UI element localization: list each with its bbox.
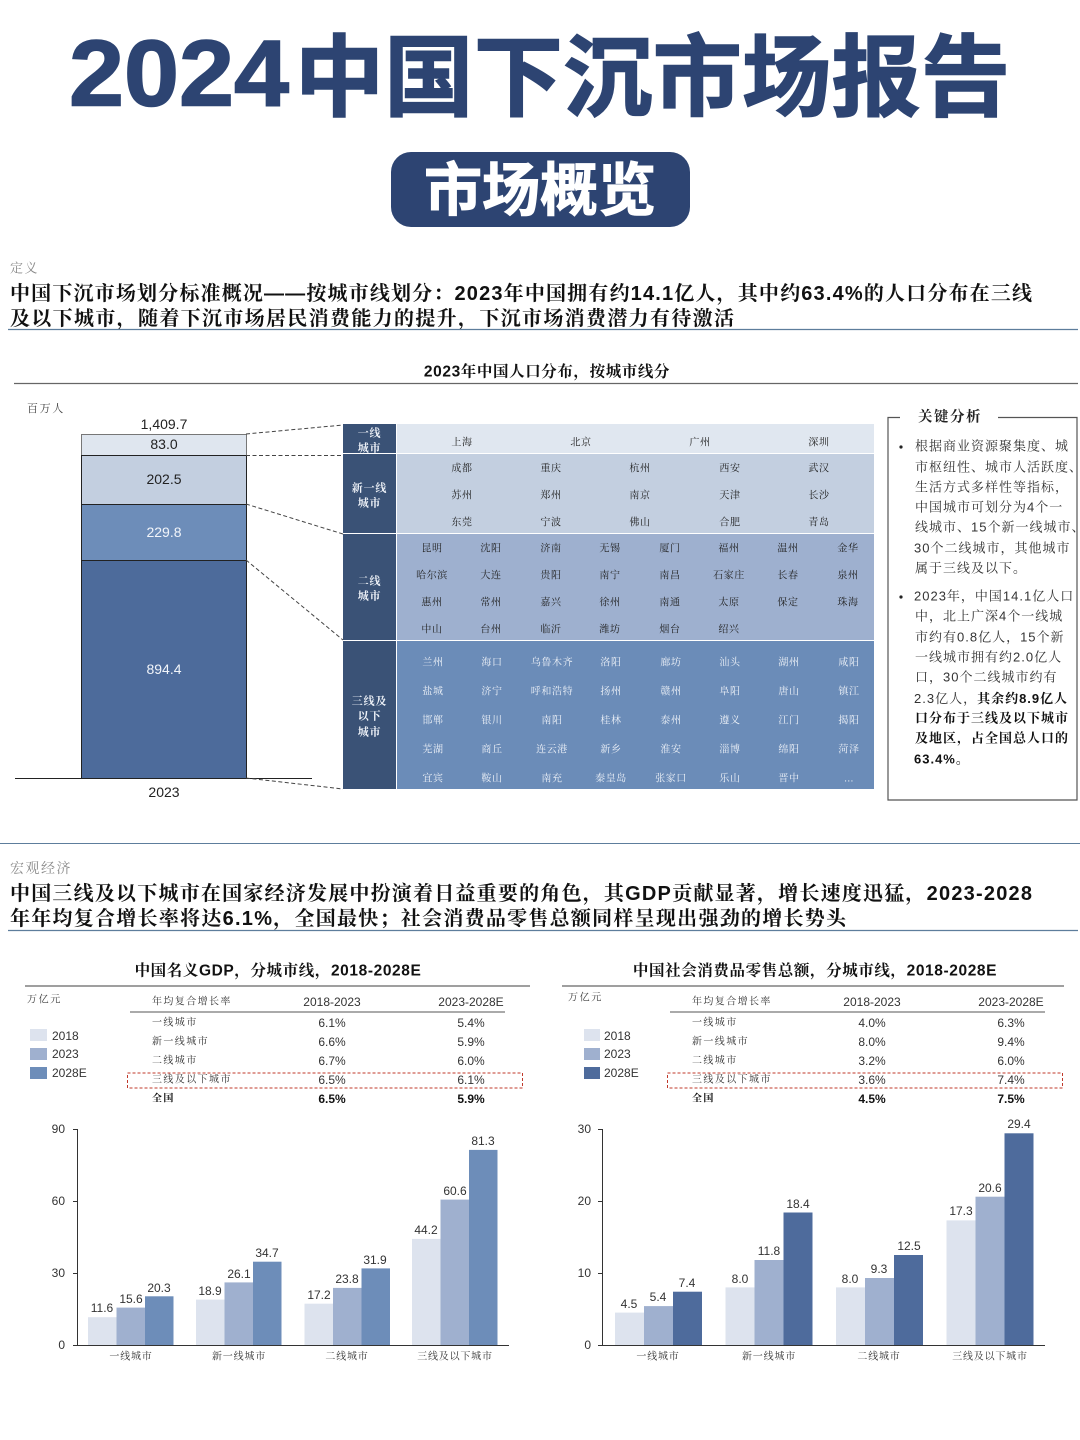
tier row: third-tier and below: 乌鲁木齐	[531, 656, 573, 668]
tier row: new first-tier: 宁波	[540, 516, 562, 528]
tier row: third-tier and below: 连云港	[536, 742, 568, 756]
tier row: second-tier: 无锡	[599, 542, 621, 554]
bar values: 1,409.7	[141, 416, 188, 432]
CAGR table: 6.3%	[997, 1016, 1025, 1030]
tier row: third-tier and below: 南充	[541, 772, 563, 784]
tier row: third-tier and below: 淮安	[660, 742, 682, 756]
tier row: second-tier: 保定	[777, 596, 799, 608]
bar chart: GDP: 60.6	[443, 1184, 467, 1198]
bullet two: 口，30个二线城市约有	[915, 670, 1057, 686]
CAGR table: 8.0%	[858, 1035, 886, 1049]
tier row: second-tier: 徐州	[599, 596, 621, 608]
tier row: new first-tier: 郑州	[540, 488, 562, 502]
tier row: third-tier and below: 张家口	[655, 772, 687, 784]
tier row: first-tier: 城市	[358, 440, 381, 454]
tier row: third-tier and below: 海口	[481, 656, 503, 668]
tier row: third-tier and below: 南阳	[541, 714, 563, 726]
bullet two	[899, 588, 1074, 766]
tier row: second-tier: 嘉兴	[540, 596, 562, 608]
bar values: 229.8	[146, 524, 182, 540]
tier row: third-tier and below: 镇江	[838, 684, 860, 698]
panel: retail sales chart	[562, 960, 1064, 1362]
tier row: second-tier: 大连	[480, 568, 502, 582]
bullet two: 63.4%。	[914, 752, 970, 766]
bar chart: retail sales: 新一线城市	[742, 1350, 796, 1362]
section label: 宏观经济: 宏观经济	[10, 860, 72, 876]
CAGR table: 一线城市	[692, 1016, 738, 1028]
bar chart: retail sales: 一线城市	[636, 1350, 680, 1362]
stacked population bar	[15, 402, 312, 800]
tier row: third-tier and below: 唐山	[778, 684, 800, 698]
section heading: macro economy: 年年均复合增长率将达6.1%，全国最快；社会消费品零售总额同样呈现出强劲的增长势头	[10, 906, 848, 930]
tier row: third-tier and below: 遵义	[719, 714, 741, 726]
tier row: third-tier and below: 泰州	[660, 714, 682, 726]
tier row: second-tier: 台州	[480, 622, 502, 636]
bar chart: GDP: 44.2	[414, 1223, 438, 1237]
tier row: new first-tier: 苏州	[451, 488, 473, 502]
bar chart: GDP	[52, 1122, 509, 1362]
tier row: third-tier and below: 菏泽	[838, 742, 860, 756]
bar chart: GDP: 26.1	[227, 1267, 251, 1281]
tier row: third-tier and below: 三线及	[352, 694, 387, 708]
bullet two: 口分布于三线及以下城市	[915, 710, 1069, 726]
CAGR table: 6.5%	[318, 1092, 346, 1106]
tier row: second-tier: 石家庄	[713, 568, 745, 582]
bar chart: retail sales: 18.4	[786, 1197, 810, 1211]
tier row: new first-tier: 南京	[629, 488, 651, 502]
tier row: second-tier: 惠州	[421, 596, 443, 608]
subtitle pill: 市场概览	[391, 152, 690, 227]
title: 中国下沉市场报告	[295, 28, 1010, 128]
tier row: new first-tier: 长沙	[808, 488, 830, 502]
tier row: first-tier	[343, 424, 874, 454]
tier row: new first-tier: 城市	[358, 496, 381, 510]
bar chart: retail sales: 4.5	[621, 1297, 638, 1311]
tier row: first-tier: 一线	[358, 426, 381, 440]
bar chart: GDP: 二线城市	[325, 1350, 369, 1362]
CAGR table: 2018-2023	[843, 995, 901, 1009]
bar chart: GDP: 34.7	[255, 1246, 279, 1260]
tier row: third-tier and below: 乐山	[719, 772, 741, 784]
tier row: second-tier: 长春	[777, 568, 799, 582]
bar chart: GDP: 18.9	[198, 1284, 222, 1298]
bullet two: 市约有0.8亿人，15个新	[915, 630, 1065, 646]
tier row: third-tier and below: 银川	[481, 714, 503, 726]
tier row: third-tier and below	[343, 641, 874, 789]
bar segments	[82, 434, 246, 778]
bar values: 202.5	[146, 471, 182, 487]
bar chart: GDP: 31.9	[363, 1253, 387, 1267]
tier row: third-tier and below: 汕头	[719, 656, 741, 668]
bar chart: GDP: 15.6	[119, 1292, 143, 1306]
CAGR table: 年均复合增长率	[152, 994, 232, 1008]
tier row: new first-tier: 武汉	[808, 462, 830, 474]
legend: 2028E	[604, 1066, 639, 1080]
CAGR table: 6.0%	[997, 1054, 1025, 1068]
CAGR table: 二线城市	[692, 1054, 738, 1066]
bar chart: retail sales: 10	[578, 1266, 591, 1280]
bar chart: GDP: 11.6	[91, 1301, 114, 1315]
tier row: second-tier: 泉州	[837, 568, 859, 582]
bar chart: GDP: 23.8	[335, 1272, 359, 1286]
section heading: macro economy	[10, 881, 1032, 930]
tier row: third-tier and below: 咸阳	[838, 656, 860, 668]
CAGR table: 三线及以下城市	[692, 1072, 772, 1086]
tier row: second-tier: 烟台	[659, 622, 681, 636]
CAGR table: 一线城市	[152, 1016, 198, 1028]
bar chart: retail sales	[578, 1117, 1045, 1362]
bar chart: retail sales: 20.6	[978, 1181, 1002, 1195]
bullet one: 生活方式多样性等指标，	[915, 480, 1069, 496]
tier row: third-tier and below: 赣州	[660, 684, 682, 698]
tier row: new first-tier: 合肥	[719, 516, 741, 528]
tier row: second-tier: 厦门	[659, 542, 681, 554]
legend: 2018	[604, 1029, 631, 1043]
bullet two: 一线城市拥有约2.0亿人	[915, 650, 1062, 664]
bullet one: 属于三线及以下。	[915, 560, 1027, 576]
bar chart: retail sales: 5.4	[650, 1290, 667, 1304]
tier row: third-tier and below: 绵阳	[778, 742, 800, 756]
tier row: second-tier: 潍坊	[599, 622, 621, 636]
CAGR table: 5.9%	[457, 1092, 485, 1106]
tier row: new first-tier: 天津	[719, 488, 741, 502]
tier row: second-tier: 南通	[659, 596, 681, 608]
tier row: third-tier and below: 湖州	[778, 656, 800, 668]
tier row: second-tier: 福州	[718, 542, 740, 554]
tier row: third-tier and below: 盐城	[422, 684, 444, 698]
section heading: definition	[10, 281, 1032, 330]
legend	[30, 1029, 87, 1080]
bar chart: retail sales: 11.8	[758, 1244, 781, 1258]
section label: 定义: 定义	[10, 260, 39, 276]
bar values: 894.4	[146, 661, 182, 677]
tier row: third-tier and below: 商丘	[481, 742, 503, 756]
bar chart: retail sales: 三线及以下城市	[952, 1350, 1028, 1362]
panel: GDP chart	[25, 960, 530, 1362]
tier row: new first-tier: 青岛	[808, 516, 830, 528]
tier row: first-tier: 广州	[689, 436, 711, 448]
bar chart: retail sales: 29.4	[1007, 1117, 1031, 1131]
unit label: 万亿元	[27, 992, 62, 1006]
legend: 2018	[52, 1029, 79, 1043]
CAGR table: 4.0%	[858, 1016, 886, 1030]
tier row: second-tier: 温州	[777, 542, 799, 554]
tier row: third-tier and below: 阜阳	[719, 684, 741, 698]
title: 2024	[69, 20, 289, 126]
CAGR table: 4.5%	[858, 1092, 886, 1106]
CAGR table: 6.0%	[457, 1054, 485, 1068]
legend: 2028E	[52, 1066, 87, 1080]
CAGR table: 9.4%	[997, 1035, 1025, 1049]
bar chart: GDP: 81.3	[471, 1134, 495, 1148]
tier row: new first-tier: 东莞	[451, 516, 473, 528]
tier row: third-tier and below: …	[844, 774, 854, 784]
bullet one: 根据商业资源聚集度、城	[915, 438, 1069, 454]
tier row: second-tier: 太原	[718, 596, 740, 608]
bar chart: retail sales: 二线城市	[857, 1350, 901, 1362]
tier row: second-tier: 珠海	[837, 596, 859, 608]
chart title: population: 2023年中国人口分布，按城市线分	[424, 362, 670, 382]
tier row: new first-tier	[343, 454, 874, 533]
bar chart: GDP: 0	[58, 1338, 65, 1352]
tier row: third-tier and below: 邯郸	[422, 714, 444, 726]
tier row: third-tier and below: 新乡	[600, 742, 622, 756]
CAGR table: 三线及以下城市	[152, 1072, 232, 1086]
tier row: third-tier and below: 鞍山	[481, 772, 503, 784]
tier row: second-tier: 绍兴	[718, 624, 740, 636]
bar chart: retail sales: 9.3	[871, 1262, 888, 1276]
bar chart: GDP: 17.2	[307, 1288, 331, 1302]
CAGR table: 全国	[152, 1092, 175, 1104]
tier row: third-tier and below: 济宁	[481, 684, 503, 698]
tier row: third-tier and below: 宜宾	[422, 772, 444, 784]
tier row: second-tier: 昆明	[421, 542, 443, 554]
bullet one: 30个二线城市，其他城市	[914, 540, 1070, 556]
bar chart: retail sales: 0	[584, 1338, 591, 1352]
tier row: second-tier: 城市	[358, 588, 381, 602]
tier row: second-tier: 南昌	[659, 568, 681, 582]
tier row: third-tier and below: 揭阳	[838, 714, 860, 726]
section heading: macro economy: 中国三线及以下城市在国家经济发展中扮演着日益重要的角色，其GDP贡献显著，增长速度迅猛，2023-2028	[10, 881, 1032, 905]
panel heading: 关键分析	[918, 408, 982, 426]
tier row: third-tier and below: 晋中	[778, 772, 800, 784]
bullet two: 2.3亿人，其余约8.9亿人	[914, 690, 1068, 706]
connector lines	[246, 425, 343, 789]
bullet two: 2023年，中国14.1亿人口	[914, 588, 1074, 604]
tier row: third-tier and below: 扬州	[600, 684, 622, 698]
bar chart: retail sales: 30	[578, 1122, 591, 1136]
tier row: third-tier and below: 以下	[358, 708, 381, 722]
CAGR table: 6.1%	[318, 1016, 346, 1030]
CAGR table	[128, 994, 522, 1106]
CAGR table: 6.7%	[318, 1054, 346, 1068]
tier row: third-tier and below: 城市	[358, 724, 381, 738]
chart title: 中国社会消费品零售总额，分城市线，2018-2028E	[633, 960, 997, 980]
tier row: second-tier: 南宁	[599, 568, 621, 582]
chart title: 中国名义GDP，分城市线，2018-2028E	[135, 960, 421, 980]
tier row: second-tier: 常州	[480, 596, 502, 608]
tier row: second-tier: 临沂	[540, 622, 562, 636]
tier row: new first-tier: 重庆	[540, 462, 562, 474]
bullet one: 中国城市可划分为4个一	[915, 500, 1063, 514]
unit label: 百万人	[27, 402, 65, 415]
city tier table	[343, 424, 874, 789]
bar values: 2023	[148, 784, 180, 800]
bar chart: retail sales: 8.0	[732, 1272, 749, 1286]
tier row: new first-tier: 新一线	[352, 480, 387, 494]
bar chart: GDP: 一线城市	[109, 1350, 153, 1362]
legend: 2023	[52, 1047, 79, 1061]
bar chart: retail sales: 8.0	[842, 1272, 859, 1286]
CAGR table	[668, 994, 1062, 1106]
bullet one: 市枢纽性、城市人活跃度、	[915, 460, 1080, 474]
CAGR table: 全国	[692, 1092, 715, 1104]
tier row: second-tier: 金华	[837, 542, 859, 554]
CAGR table: 5.4%	[457, 1016, 485, 1030]
CAGR table: 新一线城市	[152, 1034, 209, 1048]
bar chart: GDP: 30	[52, 1266, 65, 1280]
CAGR table: 7.5%	[997, 1092, 1025, 1106]
CAGR table: 3.6%	[858, 1073, 886, 1087]
tier row: third-tier and below: 廊坊	[660, 656, 682, 668]
bar values: 83.0	[150, 436, 178, 452]
tier row: third-tier and below: 淄博	[719, 742, 741, 756]
tier row: first-tier: 北京	[570, 436, 592, 448]
CAGR table: 2018-2023	[303, 995, 361, 1009]
CAGR table: 6.1%	[457, 1073, 485, 1087]
subtitle pill: 市场概览: 市场概览	[424, 158, 656, 224]
CAGR table: 二线城市	[152, 1054, 198, 1066]
legend: 2023	[604, 1047, 631, 1061]
tier row: second-tier: 中山	[421, 622, 443, 636]
panel: key analysis	[888, 408, 1080, 800]
bar chart: retail sales: 20	[578, 1194, 591, 1208]
bar chart: GDP: 新一线城市	[212, 1350, 266, 1362]
CAGR table: 7.4%	[997, 1073, 1025, 1087]
bar values	[141, 416, 188, 800]
tier row: third-tier and below: 桂林	[600, 714, 622, 726]
tier row: second-tier: 济南	[540, 542, 562, 554]
tier row: third-tier and below: 呼和浩特	[531, 684, 573, 698]
tier row: first-tier: 深圳	[808, 436, 830, 448]
tier row: third-tier and below: 兰州	[422, 656, 444, 668]
tier row: second-tier: 哈尔滨	[416, 568, 448, 582]
tier row: new first-tier: 西安	[719, 462, 741, 474]
bar chart: GDP: 20.3	[147, 1281, 171, 1295]
CAGR table: 6.6%	[318, 1035, 346, 1049]
tier row: second-tier: 二线	[358, 574, 381, 588]
bullet two: 及地区，占全国总人口的	[915, 730, 1069, 746]
bar chart: GDP: 60	[52, 1194, 65, 1208]
bar chart: retail sales: 17.3	[949, 1204, 973, 1218]
tier row: first-tier: 上海	[451, 436, 473, 448]
tier row: new first-tier: 成都	[451, 462, 473, 474]
section heading: definition: 中国下沉市场划分标准概况——按城市线划分：2023年中国拥有约14.1亿人，其中约63.4%的人口分布在三线	[10, 281, 1032, 305]
tier row: third-tier and below: 秦皇岛	[595, 772, 627, 784]
bar chart: GDP: 三线及以下城市	[417, 1350, 493, 1362]
CAGR table: 5.9%	[457, 1035, 485, 1049]
legend	[584, 1029, 639, 1080]
section heading: definition: 及以下城市，随着下沉市场居民消费能力的提升，下沉市场消费潜力有待激活	[10, 307, 734, 330]
bar chart: retail sales: 12.5	[897, 1239, 921, 1253]
CAGR table: 2023-2028E	[978, 995, 1044, 1009]
bullet two: 中，北上广深4个一线城	[915, 608, 1063, 624]
bar chart: retail sales: 7.4	[679, 1276, 696, 1290]
unit label: 万亿元	[568, 990, 603, 1004]
tier row: third-tier and below: 江门	[778, 714, 800, 726]
CAGR table: 2023-2028E	[438, 995, 504, 1009]
tier row: second-tier	[343, 534, 874, 640]
CAGR table: 3.2%	[858, 1054, 886, 1068]
bar chart: GDP: 90	[52, 1122, 65, 1136]
tier row: second-tier: 沈阳	[480, 542, 502, 554]
CAGR table: 6.5%	[318, 1073, 346, 1087]
CAGR table: 年均复合增长率	[692, 994, 772, 1008]
tier row: new first-tier: 佛山	[629, 516, 651, 528]
tier row: new first-tier: 杭州	[629, 462, 651, 474]
tier row: third-tier and below: 洛阳	[600, 656, 622, 668]
tier row: third-tier and below: 芜湖	[422, 742, 444, 756]
CAGR table: 新一线城市	[692, 1034, 749, 1048]
bullet one	[899, 438, 1080, 576]
tier row: second-tier: 贵阳	[540, 568, 562, 582]
